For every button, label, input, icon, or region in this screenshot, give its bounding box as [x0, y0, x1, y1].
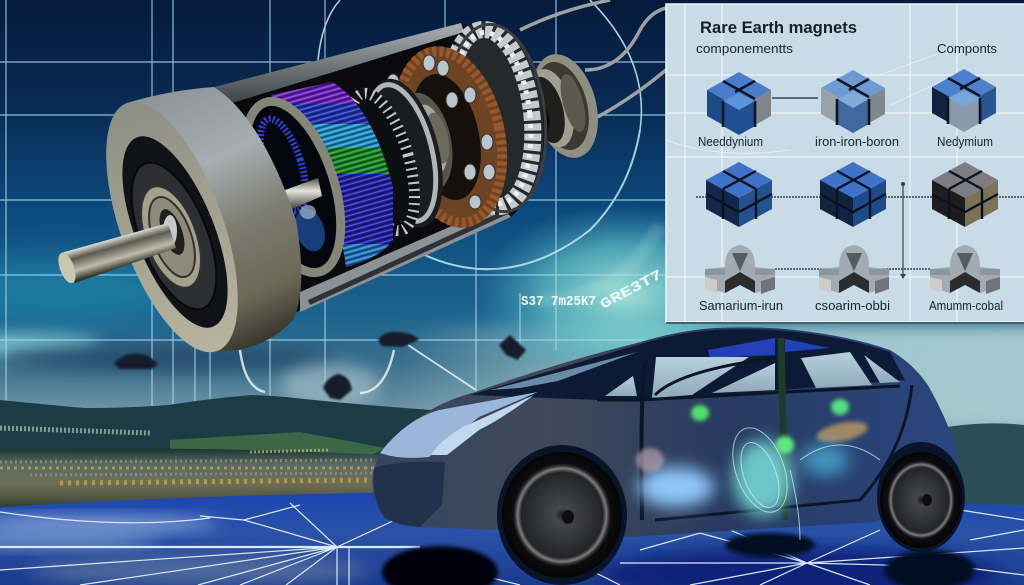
background: hills [0, 395, 1024, 512]
hood [380, 392, 538, 458]
label: Nedymium: Nedymium [937, 134, 993, 149]
motor shaft [55, 223, 176, 285]
electric car [372, 327, 965, 585]
finned rotor wheel [331, 78, 433, 246]
column heading right: Componts [937, 41, 998, 56]
magnet cube: blue middle left [706, 162, 772, 227]
electric motor [55, 16, 609, 368]
connector lines [696, 98, 1024, 279]
magnet cube: bronze [932, 162, 998, 227]
ground: glowing blue road network [0, 490, 1024, 585]
front bumper [374, 462, 445, 527]
magnet cube: Nedymium [932, 69, 996, 132]
silver bearing rings [354, 71, 456, 235]
motor body shell [214, 23, 550, 350]
headlight [431, 395, 534, 455]
blue roof glass [708, 338, 830, 358]
rainbow magnet stator band [271, 82, 393, 267]
copper winding disc with bolts [377, 36, 523, 238]
label: Samarium-irun: Samarium-irun [699, 298, 783, 313]
label: Amumm-cobal: Amumm-cobal [929, 298, 1003, 313]
garbled formula text, rising part: GRE3T7 [598, 267, 665, 313]
car body [372, 327, 963, 537]
garbled formula text: S37 7m25K7 [521, 294, 596, 310]
label: csoarim-obbi: csoarim-obbi [815, 298, 890, 313]
rear wheel [877, 442, 965, 552]
outer steel ring [79, 86, 301, 368]
front bearing hub [129, 179, 213, 295]
windows [490, 352, 900, 398]
city lights [0, 428, 375, 483]
column heading left: componementts [696, 41, 794, 56]
label: iron-iron-boron: iron-iron-boron [815, 134, 899, 149]
motor rear bell housing [521, 47, 609, 165]
magnetic field glow [636, 399, 880, 540]
magnet shape: Samarium-irun [705, 245, 775, 294]
magnet cube: blue middle centre [820, 162, 886, 227]
background: blueprint grid lines and arcs [0, 0, 665, 500]
magnet shape: Amumm-cobal [930, 245, 1000, 294]
cooling fins on far end [433, 16, 555, 220]
central silver hub [389, 88, 461, 196]
magnet shape: csoarim-obbi [819, 245, 889, 294]
magnet cube: iron-iron-boron [821, 70, 885, 133]
inner ring with blue core [227, 90, 359, 284]
panel: rare earth magnets components [666, 4, 1024, 324]
roof frame [470, 329, 905, 400]
panel heading: Rare Earth magnets [700, 18, 857, 37]
wires behind motor [520, 0, 666, 120]
label: Needdynium: Needdynium [698, 134, 763, 149]
small flying cars [114, 332, 526, 400]
front wheel [497, 445, 627, 585]
door and pillar frame [597, 338, 912, 520]
magnet cube: Needdynium [707, 72, 771, 135]
